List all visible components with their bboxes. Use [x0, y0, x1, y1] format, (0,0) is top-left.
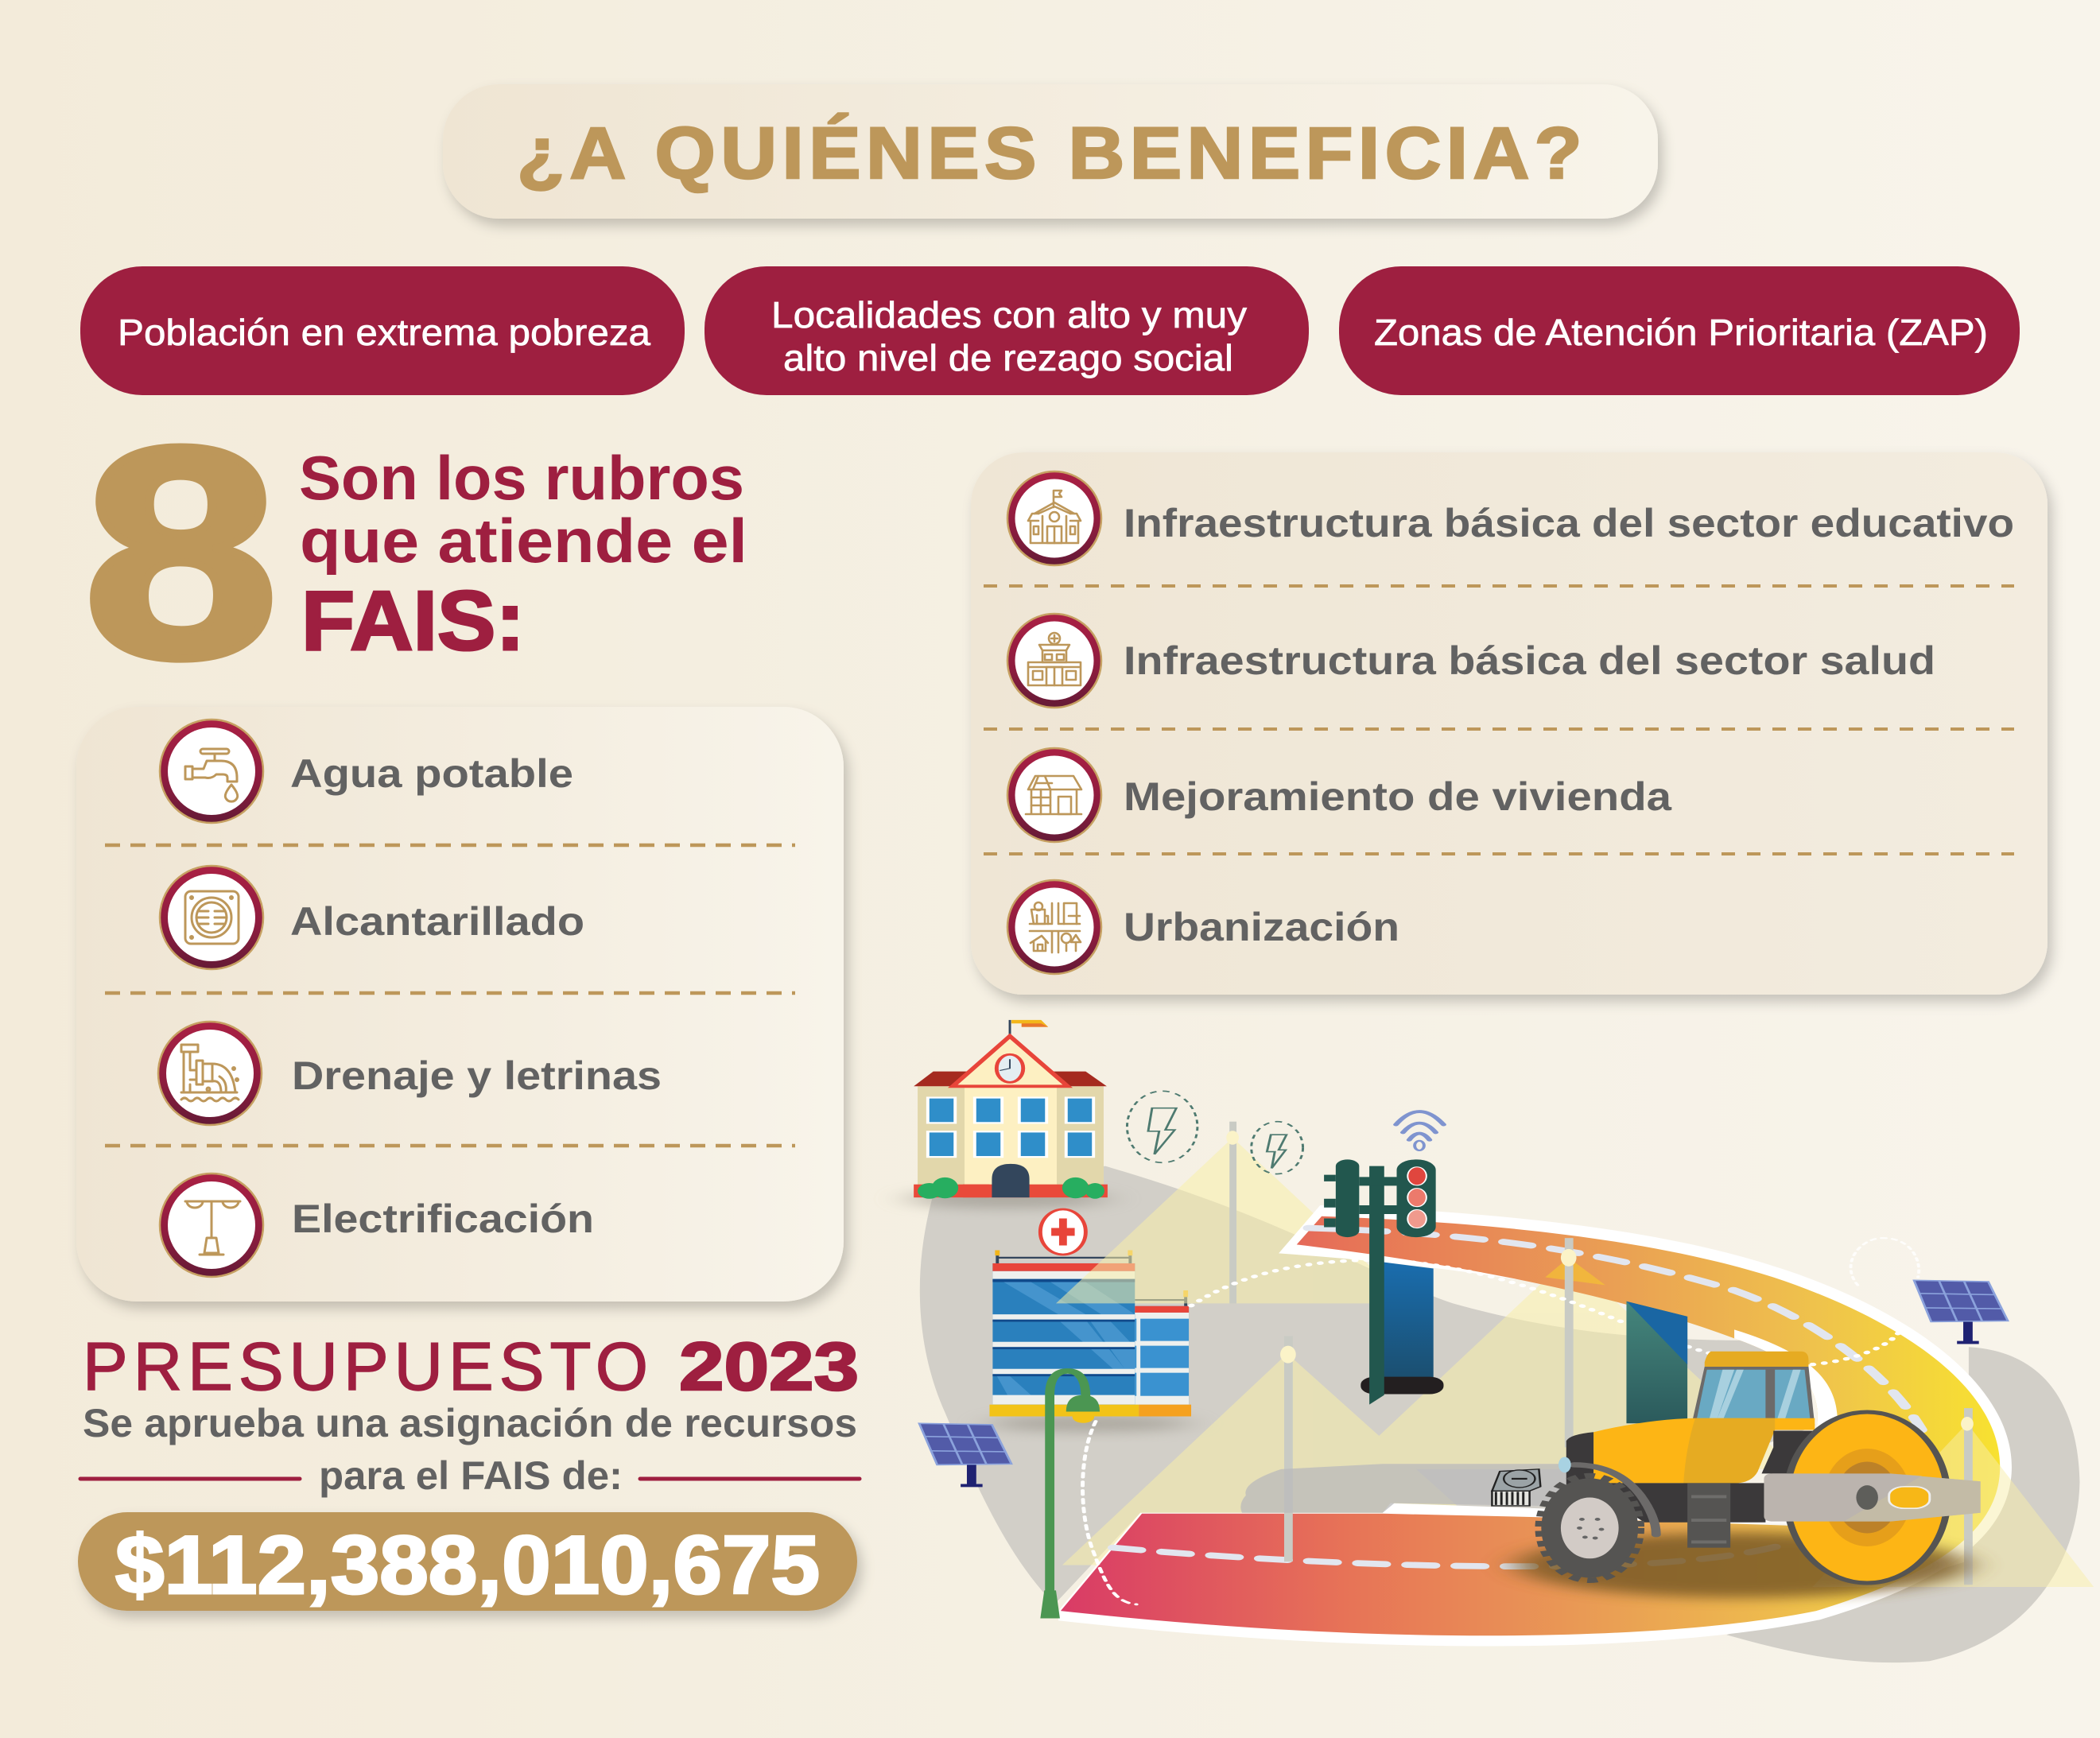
pill: rezago social: Localidades con alto y muy — [771, 294, 1247, 336]
illustration: road construction scene — [906, 1020, 2094, 1662]
item: agua potable: Agua potable — [290, 751, 573, 796]
school building — [906, 1020, 1109, 1208]
budget description: Se aprueba una asignación de recursos — [83, 1401, 857, 1445]
item: electrificación — [160, 1174, 594, 1277]
pill: extrema pobreza: Población en extrema pobreza — [118, 312, 650, 353]
dotted connections — [1083, 1238, 1919, 1604]
big number 8: 8 — [83, 386, 278, 720]
icon: lightning — [1127, 1091, 1303, 1174]
road roller — [1516, 1352, 1981, 1598]
panel: right list — [971, 452, 2048, 995]
road — [1058, 1205, 2012, 1646]
pill: extrema pobreza — [80, 266, 685, 395]
item: sector educativo — [1007, 471, 2014, 565]
title banner — [443, 84, 1658, 219]
item: vivienda: Mejoramiento de vivienda — [1124, 774, 1672, 819]
ground blobs — [920, 1166, 2079, 1662]
solar panel left — [919, 1423, 1011, 1487]
green street lamp — [1040, 1371, 1100, 1618]
item: sector educativo: Infraestructura básica del sector educativo — [1124, 501, 2014, 545]
heading: rubros FAIS — [299, 443, 747, 668]
pill: rezago social: alto nivel de rezago social — [783, 337, 1233, 378]
budget amount: $112,388,010,675 — [115, 1519, 820, 1612]
budget description: para el FAIS de: — [319, 1453, 623, 1498]
heading: presupuesto 2023: PRESUPUESTO — [83, 1329, 648, 1405]
item: sector salud — [1007, 614, 1935, 708]
icon: wifi — [1396, 1111, 1443, 1150]
title banner: ¿A QUIÉNES BENEFICIA? — [517, 112, 1587, 194]
panel: left list — [76, 707, 844, 1302]
item: drenaje y letrinas: Drenaje y letrinas — [292, 1053, 662, 1098]
item: urbanización — [1007, 880, 1399, 974]
item: alcantarillado — [160, 866, 584, 969]
item: vivienda — [1007, 748, 1672, 842]
item: sector salud: Infraestructura básica del sector salud — [1124, 638, 1935, 683]
light cones behind road — [1056, 1138, 1797, 1565]
heading: rubros FAIS: que atiende el — [300, 506, 747, 576]
manhole machine — [1240, 1464, 1734, 1513]
heading: rubros FAIS: FAIS: — [301, 574, 525, 668]
heading: presupuesto 2023: 2023 — [679, 1329, 859, 1405]
item: agua potable — [160, 720, 573, 823]
hospital building — [988, 1209, 1191, 1432]
pill: zonas prioritarias — [1339, 266, 2020, 395]
item: drenaje y letrinas — [158, 1022, 662, 1125]
item: electrificación: Electrificación — [292, 1197, 594, 1241]
item: urbanización: Urbanización — [1124, 905, 1399, 949]
light tips over road and poles — [1226, 1122, 2094, 1587]
pill: rezago social — [705, 266, 1309, 395]
item: alcantarillado: Alcantarillado — [290, 899, 584, 944]
budget description — [80, 1401, 860, 1498]
solar panel right — [1914, 1280, 2008, 1344]
traffic light and pillars — [1324, 1159, 1687, 1423]
pill: zonas prioritarias: Zonas de Atención Prioritaria (ZAP) — [1374, 312, 1988, 353]
heading: rubros FAIS: Son los rubros — [299, 443, 744, 513]
